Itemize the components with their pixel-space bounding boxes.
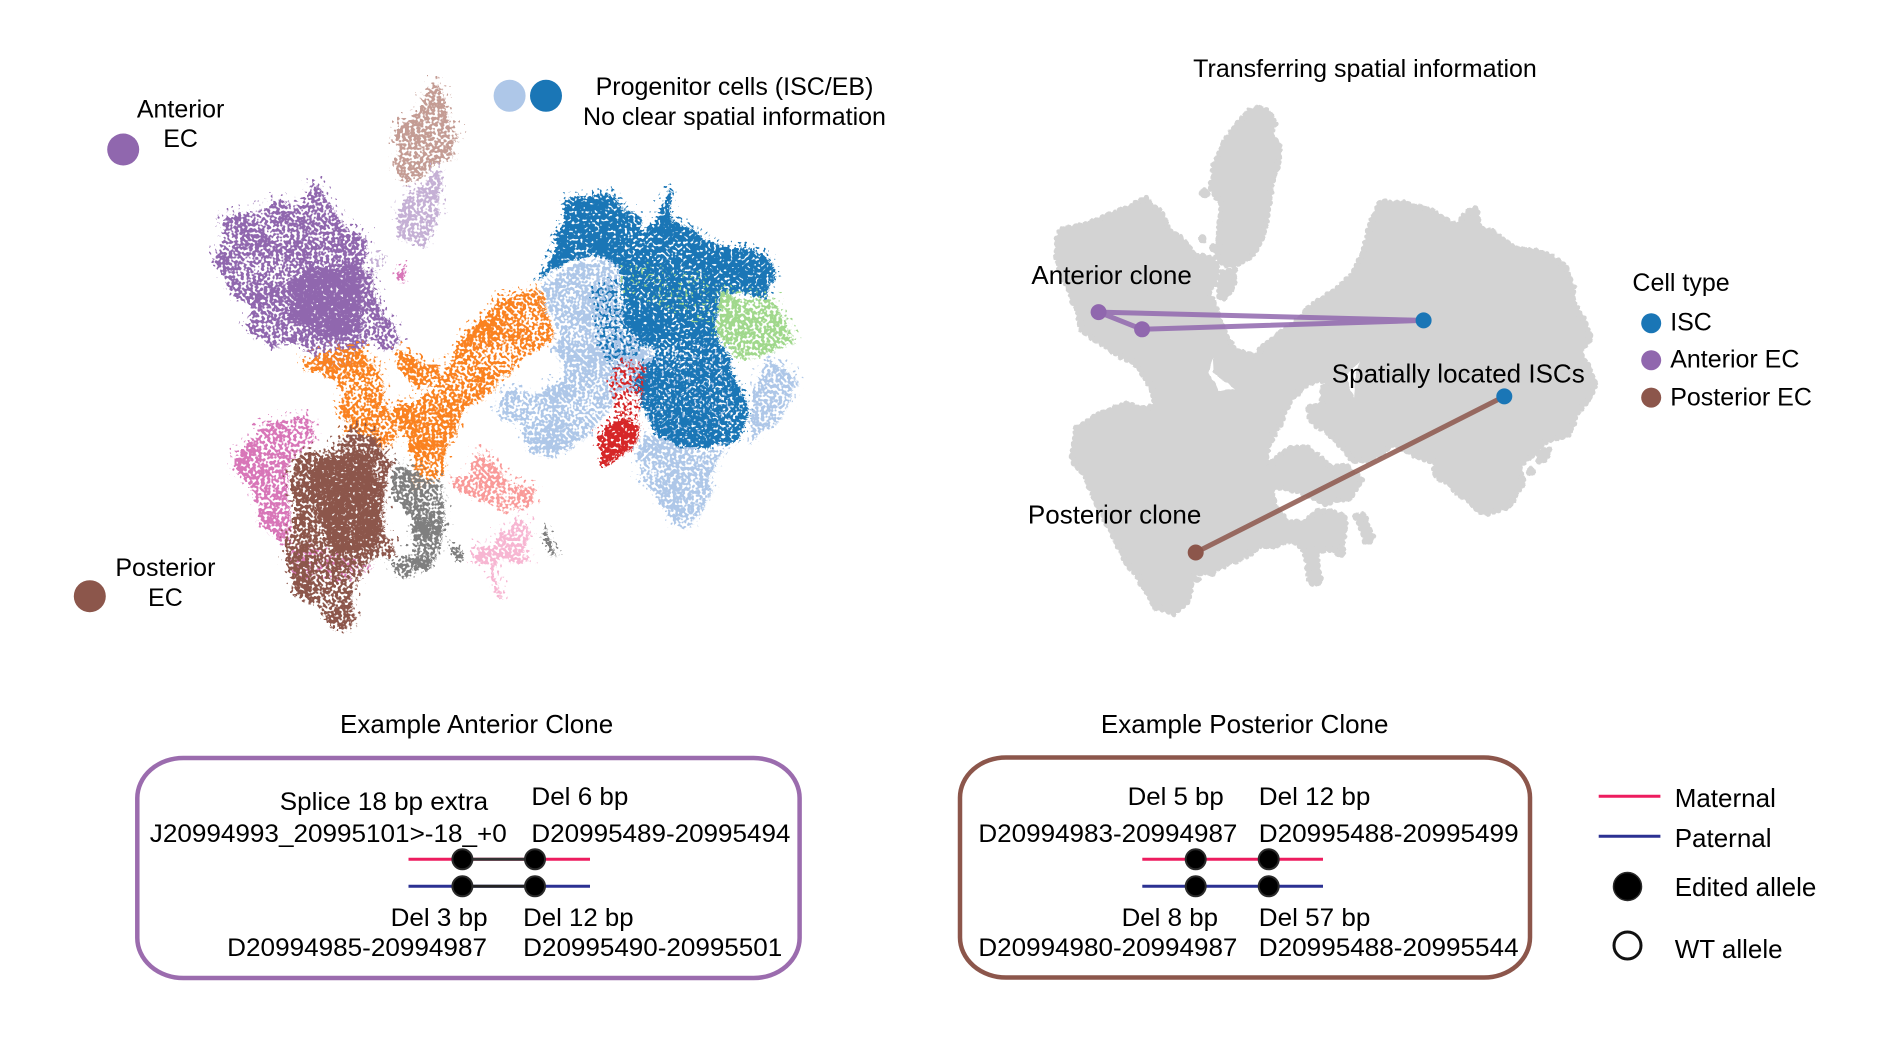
heading: Example Anterior Clone: Example Anterior Clone <box>340 709 613 739</box>
label: progenitor cells: Progenitor cells (ISC/EB) <box>596 73 873 101</box>
maternal allele <box>408 849 590 869</box>
paternal allele <box>1142 876 1323 896</box>
edit labels: D20995488-20995499 <box>1259 820 1519 848</box>
label: Posterior EC: EC <box>148 584 183 612</box>
edit labels: Del 5 bp <box>1128 783 1224 811</box>
label: Spatially located ISCs: Spatially located ISCs <box>1332 358 1585 388</box>
edit labels: Del 8 bp <box>1122 904 1218 932</box>
heading: Transferring spatial information: Transferring spatial information <box>1193 55 1537 83</box>
cluster: light green cells <box>717 297 795 363</box>
spatial link: posterior clone <box>1188 388 1512 560</box>
legend: cell type: Anterior EC <box>1670 346 1799 374</box>
legend: cell type: Posterior EC <box>1670 384 1812 412</box>
cluster: light purple cells <box>397 173 447 248</box>
edit labels: D20995489-20995494 <box>531 820 790 848</box>
legend: allele key: Maternal <box>1675 783 1776 813</box>
edit labels: Del 3 bp <box>391 904 488 932</box>
cluster: progenitor light blue <box>493 257 800 523</box>
edit labels: D20994983-20994987 <box>978 820 1237 848</box>
legend: cell type: ISC <box>1670 309 1712 337</box>
edit labels: Del 12 bp <box>523 904 634 932</box>
label: progenitor cells <box>494 73 886 131</box>
cluster: posterior EC brown <box>283 433 395 632</box>
heading: Example Posterior Clone: Example Posterior Clone <box>1101 709 1388 739</box>
legend: allele key: Edited allele <box>1675 872 1816 902</box>
edit labels: Splice 18 bp extra <box>280 788 488 816</box>
edit labels: D20995488-20995544 <box>1259 934 1519 962</box>
edit labels: D20994985-20994987 <box>227 934 487 962</box>
cluster: red cells <box>592 357 650 465</box>
label: Anterior EC <box>107 95 224 166</box>
edit labels: D20994980-20994987 <box>978 934 1237 962</box>
legend: allele key: Paternal <box>1675 823 1772 853</box>
edit labels: Del 6 bp <box>531 783 628 811</box>
panel: UMAP scatter of cell clusters <box>217 86 800 632</box>
label: Anterior EC: EC <box>163 125 198 153</box>
label: Anterior EC: Anterior <box>137 95 224 123</box>
cluster: light pink cells <box>475 517 532 600</box>
edit labels <box>978 783 1519 962</box>
label: Posterior clone: Posterior clone <box>1028 500 1201 530</box>
cluster: anterior EC purple <box>217 186 402 370</box>
cluster: orange enterocyte bridge <box>302 290 553 490</box>
panel: example posterior clone <box>960 758 1530 978</box>
label: Posterior EC <box>74 554 215 612</box>
edit labels: Del 57 bp <box>1259 904 1370 932</box>
edit labels: D20995490-20995501 <box>523 934 782 962</box>
panel: example anterior clone <box>137 758 800 978</box>
spatial links: anterior clone <box>1091 304 1432 337</box>
cluster: small pink spot <box>396 265 408 283</box>
paternal allele <box>408 876 590 896</box>
cluster: upper tan cells <box>389 86 457 184</box>
cluster: dark gray cells <box>390 463 558 580</box>
label: progenitor cells: No clear spatial information <box>583 103 886 131</box>
maternal allele <box>1142 849 1323 869</box>
overlay: light green cells mixed into ISC <box>620 263 713 327</box>
edit labels: Del 12 bp <box>1259 783 1370 811</box>
cluster: ISC dark blue <box>540 190 773 447</box>
label: Anterior clone: Anterior clone <box>1031 260 1192 290</box>
edit labels: J20994993_20995101>-18_+0 <box>150 820 507 848</box>
overlay: light blue cells mixed into ISC <box>640 340 740 440</box>
edit labels <box>150 783 790 962</box>
cluster: salmon cells <box>450 455 538 513</box>
legend: cell type: Cell type <box>1632 269 1730 297</box>
legend: allele key: WT allele <box>1675 934 1783 964</box>
panel: gray UMAP silhouette <box>1056 109 1594 614</box>
cluster: light purple tail <box>360 250 390 288</box>
label: Posterior EC: Posterior <box>115 554 215 582</box>
overlay: dark blue cells mixed into light blue <box>593 277 647 370</box>
cluster: orchid pink cells <box>237 418 377 583</box>
legend: allele key <box>1599 783 1816 964</box>
legend: cell type <box>1632 269 1812 412</box>
